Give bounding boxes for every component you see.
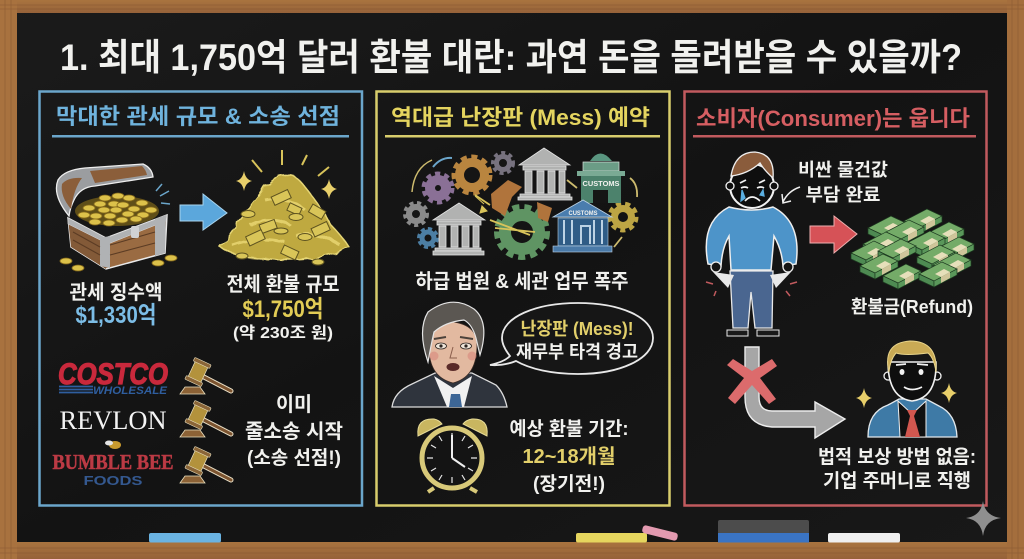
heading: consumer: 소비자(Consumer)는 웁니다 <box>696 106 970 131</box>
speech bubble: 난장판 (Mess)! <box>520 319 634 339</box>
text: no legal remedy <box>818 446 976 492</box>
tray: eraser <box>718 520 809 542</box>
logo: Bumble Bee Foods: BUMBLE BEE <box>52 450 174 474</box>
text: refund period: (장기전!) <box>533 473 605 495</box>
text: refund period <box>510 418 628 495</box>
speech bubble: 재무부 타격 경고 <box>516 342 638 362</box>
motion arrows <box>412 160 432 192</box>
illustration: gears and courthouses <box>405 148 637 257</box>
blue customs building: CUSTOMS <box>568 211 598 217</box>
grey courthouse top <box>518 148 572 200</box>
icon: red X <box>727 359 777 404</box>
logo: Costco Wholesale: WHOLESALE <box>93 385 168 397</box>
text: no legal remedy: 법적 보상 방법 없음: <box>818 446 976 468</box>
text: total refund: 전체 환불 규모 <box>226 273 340 296</box>
heading underline <box>693 135 976 138</box>
text: expensive prices <box>798 160 888 205</box>
icon: treasure chest <box>56 164 177 271</box>
green customs building <box>577 154 625 203</box>
text: tariff collected: 관세 징수액 <box>70 281 162 304</box>
text: total refund <box>226 273 340 342</box>
text: refund period: 예상 환불 기간: <box>510 418 628 440</box>
arrow: blocked path to company <box>745 347 845 438</box>
text: lawsuits begun <box>245 393 343 469</box>
icon: alarm clock <box>418 419 487 492</box>
caption: court and customs overload: 하급 법원 & 세관 업무 폭주 <box>416 270 628 293</box>
panel: tariff scale and lawsuits <box>40 92 362 506</box>
title: 1. 최대 1,750억 달러 환불 대란: 과연 돈을 돌려받을 수 있을까? <box>60 37 962 78</box>
tray: blue chalk <box>149 533 221 542</box>
panel: consumers cry <box>684 92 986 506</box>
logo: Costco Wholesale: COSTCO <box>58 358 168 391</box>
icon: stacks of money <box>851 209 974 289</box>
tray: pink chalk <box>642 525 678 541</box>
text: total refund: (약 230조 원) <box>233 324 333 342</box>
speech bubble <box>490 303 653 374</box>
icon: gavel 2 <box>180 400 231 437</box>
icon: sparkle watermark <box>966 501 1001 536</box>
logo: Bumble Bee Foods <box>52 440 174 488</box>
text: tariff collected <box>70 281 162 329</box>
arrow: pointer to consumer <box>782 187 800 203</box>
text: expensive prices: 비싼 물건값 <box>798 160 888 180</box>
gears <box>405 153 636 257</box>
text: tariff collected: $1,330억 <box>76 302 156 329</box>
icon: gold pile <box>220 150 348 265</box>
heading: tariff scale: 막대한 관세 규모 & 소송 선점 <box>56 104 340 129</box>
icon: sad consumer <box>706 152 797 336</box>
illustration: worried justice <box>392 302 507 407</box>
arrow: consumer to refund <box>810 216 857 253</box>
heading: mess: 역대급 난장판 (Mess) 예약 <box>391 105 650 130</box>
logo: Bumble Bee Foods: FOODS <box>84 473 143 488</box>
text: lawsuits begun: (소송 선점!) <box>247 447 341 469</box>
icon: smiling executive <box>856 341 957 437</box>
text: refund period: 12~18개월 <box>522 445 616 468</box>
grey courthouse left <box>433 203 485 255</box>
icon: gavel 1 <box>180 357 231 394</box>
tray: white chalk <box>828 533 900 542</box>
green customs building: CUSTOMS <box>582 179 620 188</box>
text: total refund: $1,750억 <box>242 296 324 323</box>
heading underline <box>385 135 660 138</box>
broken pieces <box>491 180 522 216</box>
icon: gavel 3 <box>180 446 231 483</box>
blue customs building <box>553 200 612 252</box>
text: lawsuits begun: 이미 <box>276 393 312 416</box>
text: refund money: 환불금(Refund) <box>851 297 973 317</box>
text: no legal remedy: 기업 주머니로 직행 <box>823 470 971 492</box>
tray: yellow chalk <box>576 533 647 542</box>
panel: historic mess <box>376 92 670 506</box>
text: lawsuits begun: 줄소송 시작 <box>245 420 343 443</box>
text: expensive prices: 부담 완료 <box>806 185 880 205</box>
heading underline <box>52 135 349 138</box>
logo: Revlon: REVLON <box>60 406 167 435</box>
arrow: chest to pile <box>180 194 227 230</box>
